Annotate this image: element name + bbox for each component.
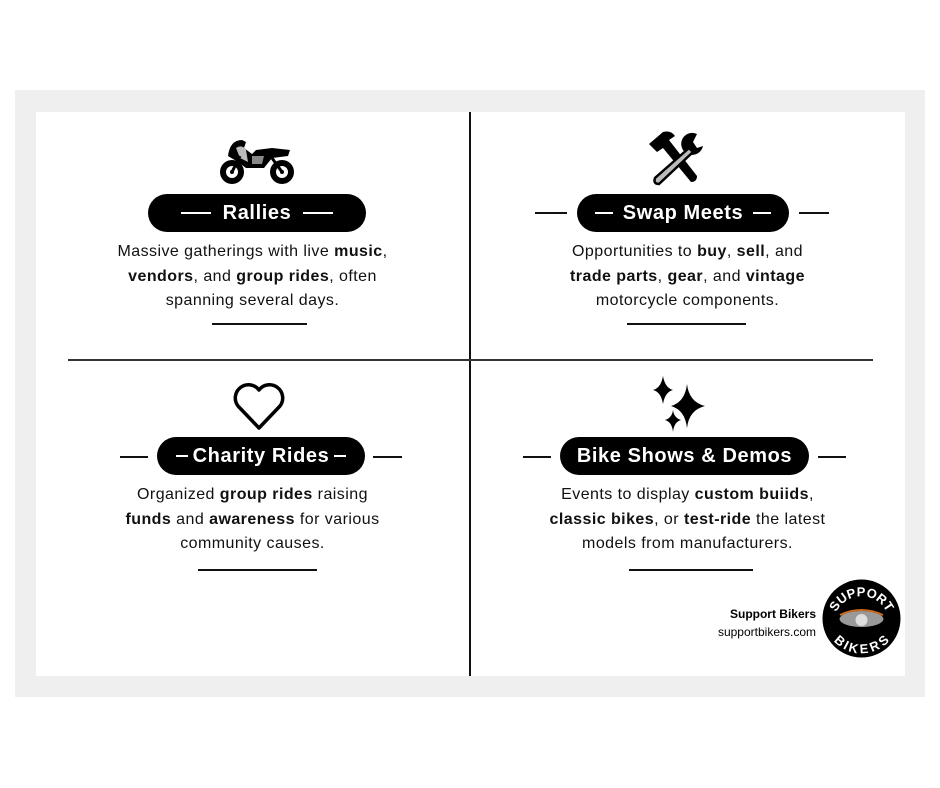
text: bike shows description [550, 486, 825, 552]
icon: heart [234, 383, 284, 430]
outer frame [15, 90, 925, 697]
text: charity description: funds and awareness for various [125, 510, 380, 528]
text: charity description [125, 486, 380, 552]
icon: tools [649, 132, 703, 186]
text: swap meets description [570, 243, 805, 309]
heading: Swap Meets [535, 212, 567, 214]
logo: badge: BIKERS [834, 634, 888, 654]
panel: charity rides [120, 383, 402, 571]
heading: Rallies: Rallies [223, 202, 291, 224]
text: charity description: Organized group rides raising [137, 486, 368, 503]
text: bike shows description: models from manufacturers. [582, 535, 793, 552]
text: swap meets description: Opportunities to buy, sell, and [572, 243, 803, 260]
heading: Rallies [148, 194, 366, 232]
text: rallies description: Massive gatherings with live music, [117, 243, 388, 260]
panel: rallies [117, 140, 388, 325]
text: charity description: community causes. [180, 535, 325, 552]
logo: badge [822, 580, 900, 658]
text: rallies description: spanning several days. [166, 292, 339, 309]
panel: swap meets: Swap Meets [623, 202, 743, 224]
panel: bike shows [523, 376, 846, 571]
heading: Charity Rides [120, 456, 148, 458]
text: bike shows description: classic bikes, or test-ride the latest [550, 510, 825, 528]
icon: motorcycle [220, 140, 294, 184]
icon: sparkles [653, 376, 705, 432]
branding: Support Bikers: Support Bikers [730, 607, 816, 621]
heading: Bike Shows & Demos [523, 456, 551, 458]
text: rallies description [117, 243, 388, 309]
panel: charity rides: Charity Rides [193, 444, 329, 466]
text: rallies description: vendors, and group rides, often [128, 268, 377, 284]
branding: Support Bikers [718, 580, 900, 658]
logo: badge: SUPPORT [830, 587, 894, 611]
text: bike shows description: Events to display custom buiids, [561, 486, 814, 503]
panel: swap meets [535, 132, 829, 325]
text: swap meets description: motorcycle components. [596, 292, 779, 309]
panel: bike shows: Bike Shows & Demos [577, 444, 792, 466]
inner panel [36, 112, 905, 676]
branding: Support Bikers: supportbikers.com [718, 625, 816, 639]
text: swap meets description: trade parts, gear, and vintage [570, 268, 805, 284]
